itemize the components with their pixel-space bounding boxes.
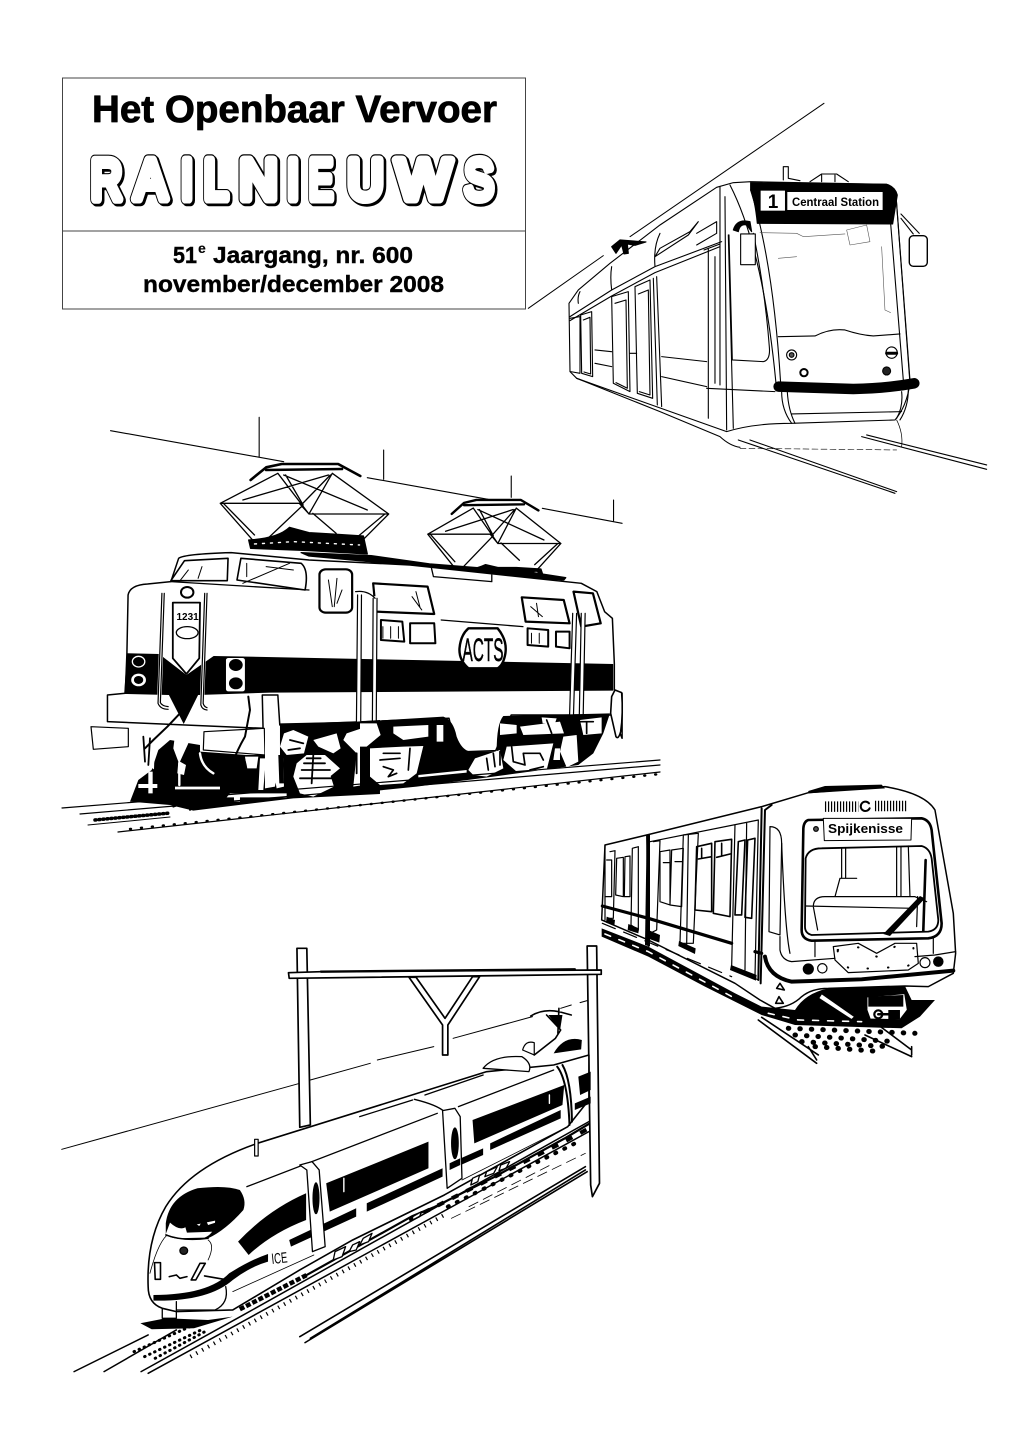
heading: RAILNIEUWS outlined: R	[93, 150, 124, 213]
tram destination sign: Centraal Station	[792, 195, 879, 209]
heading: RAILNIEUWS outlined: R	[91, 149, 122, 212]
heading: RAILNIEUWS outlined: N	[241, 150, 279, 213]
issue line: Jaargang, nr. 600	[213, 242, 413, 268]
nose window	[166, 1187, 245, 1239]
heading: RAILNIEUWS outlined: I	[181, 149, 193, 212]
catenary wire	[62, 1001, 587, 1149]
heading: RAILNIEUWS outlined: E	[309, 149, 333, 212]
number plate	[173, 603, 200, 674]
running gear	[240, 1275, 307, 1309]
tram destination sign: 1	[768, 192, 779, 213]
illustration: ICE high speed train	[62, 946, 601, 1373]
ICE lettering: ICE	[271, 1249, 288, 1268]
black livery stripe	[124, 653, 613, 724]
heading: RAILNIEUWS outlined: S	[466, 150, 495, 213]
heading: RAILNIEUWS outlined: A	[136, 150, 168, 213]
illustration: ACTS electric locomotive	[62, 417, 660, 832]
metro destination text: Spijkenisse	[828, 821, 903, 836]
heading: RAILNIEUWS outlined: U	[348, 149, 384, 212]
heading: RAILNIEUWS outlined: N	[240, 149, 278, 212]
illustration: ACTS electric locomotive: ACTS	[462, 632, 504, 668]
pantograph: rear	[428, 500, 561, 578]
heading: RAILNIEUWS outlined: L	[206, 150, 230, 213]
heading: RAILNIEUWS outlined: W	[398, 150, 453, 213]
panel: masthead	[62, 78, 526, 309]
heading: RAILNIEUWS outlined: R	[91, 149, 122, 212]
locomotive body	[107, 553, 622, 752]
ballast	[788, 1028, 915, 1052]
coupler	[818, 993, 908, 1020]
illustration: metro train	[602, 785, 956, 1063]
heading: RAILNIEUWS outlined: I	[289, 150, 301, 213]
heading: RAILNIEUWS outlined: E	[311, 150, 335, 213]
destination sign	[823, 818, 912, 841]
heading: RAILNIEUWS outlined: S	[465, 149, 494, 212]
heading: RAILNIEUWS outlined: W	[396, 149, 451, 212]
pantograph: front	[220, 464, 389, 554]
far track	[300, 1167, 587, 1343]
heading: RAILNIEUWS outlined: W	[396, 149, 451, 212]
heading: RAILNIEUWS outlined: I	[183, 150, 195, 213]
tram destination sign	[768, 192, 879, 213]
heading: RAILNIEUWS outlined	[91, 149, 495, 213]
ACTS roundel	[459, 628, 506, 668]
heading: RAILNIEUWS outlined: A	[134, 149, 167, 212]
date line: november/december 2008	[143, 271, 444, 297]
heading: RAILNIEUWS outlined: N	[240, 149, 278, 212]
rear underframe and bogie	[360, 690, 622, 793]
issue line: e	[198, 240, 206, 256]
masthead frame	[62, 78, 526, 309]
locomotive number: 1231	[176, 612, 199, 623]
heading: RAILNIEUWS outlined: A	[134, 149, 167, 212]
livery stripes	[153, 1097, 591, 1301]
title: Het Openbaar Vervoer	[92, 89, 497, 131]
nose details	[180, 1247, 188, 1254]
heading: RAILNIEUWS outlined: I	[287, 149, 299, 212]
heading: RAILNIEUWS outlined: I	[181, 149, 193, 212]
heading: RAILNIEUWS outlined: S	[465, 149, 494, 212]
heading: RAILNIEUWS outlined: U	[349, 150, 385, 213]
heading: RAILNIEUWS outlined: I	[287, 149, 299, 212]
metro body	[602, 787, 956, 1008]
gantry	[288, 946, 601, 1197]
car gangways	[300, 1108, 462, 1252]
windscreen	[802, 818, 942, 941]
coupling plate	[833, 943, 918, 973]
illustration: Combino tram	[528, 103, 987, 493]
loco track	[62, 760, 660, 832]
side doors and windows	[758, 805, 772, 983]
heading: RAILNIEUWS outlined: E	[309, 149, 333, 212]
heading: RAILNIEUWS outlined: L	[204, 149, 228, 212]
train body	[148, 1055, 589, 1312]
windows	[238, 1072, 591, 1255]
heading: RAILNIEUWS outlined: L	[204, 149, 228, 212]
issue line: 51	[173, 242, 197, 268]
right hand steps	[611, 690, 622, 738]
heading: RAILNIEUWS outlined: U	[348, 149, 384, 212]
front underframe and bogie	[91, 697, 380, 811]
